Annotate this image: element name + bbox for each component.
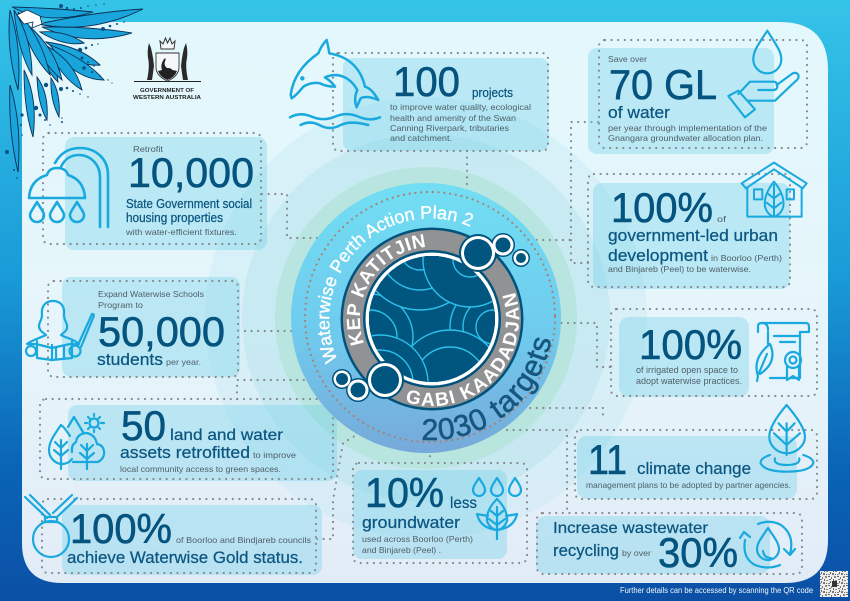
panel: 10,000 retrofit: Retrofit [133,144,164,154]
panel: 50 land and water assets: 50 [121,402,166,449]
logo: Government of Western Australia [133,38,201,101]
panel: 70 GL of water: of water [608,103,670,122]
panel: 100 projects: projects [472,86,513,100]
panel: 100% urban development [588,163,807,289]
panel: 100% Waterwise Gold: of Boorloo and Bindjareb councils [176,535,311,545]
icon: recycling water drop [740,522,795,568]
icon: trees, mountain and sun [49,414,104,469]
panel: 100 projects: and catchment. [390,133,452,143]
panel: 50 land and water assets [40,399,337,481]
panel: 10,000 retrofit: State Government social [126,197,252,211]
panel: 100% urban development: and Binjareb (Peel) to be waterwise. [608,264,751,274]
panel: 70 GL of water: 70 GL [609,61,717,108]
icon: eucalyptus leaves corner [5,3,143,179]
panel: 100% Waterwise Gold: 100% [70,505,172,552]
dotted pattern around the leaves [5,3,125,179]
panel: 70 GL of water [588,31,807,154]
panel: 100 projects: 100 [393,58,460,105]
panel: 100 projects: to improve water quality, ecological [390,102,531,112]
panel: 10% less groundwater: 10% [365,469,444,516]
panel: 100% urban development: development [608,246,708,265]
panel: 100% Waterwise Gold: achieve Waterwise Gold status. [67,548,303,567]
panel: 100% irrigated open space [611,309,817,397]
icon: certificate with leaf [756,323,809,381]
bubbles: bottom left [332,361,404,402]
connector lines [237,122,611,539]
icon: coat of arms [134,38,201,82]
footer note: Further details can be accessed by scanning the QR code [620,586,814,595]
panel: increase wastewater recycling [536,513,802,576]
icon: shower [29,148,108,227]
panel: 100% irrigated open space: of irrigated open space to [636,365,738,376]
panel: 11 climate change: climate change [637,459,751,478]
panel: 100% urban development: 100% [611,184,713,231]
icon: hand and water drop [728,31,799,117]
panel: 10% less groundwater: less [450,495,477,512]
panel: 10,000 retrofit [29,133,267,250]
icon: medal [25,495,77,557]
panel: 11 climate change [575,405,817,499]
panel: 50,000 students: per year. [166,357,201,367]
panel: 11 climate change: 11 [588,436,627,483]
panel: increase wastewater recycling: Increase wastewater [553,520,709,537]
icon: drops and leaves [473,478,521,539]
panel: 10% less groundwater [353,463,527,563]
curved title: Waterwise Perth Action Plan 2 [318,205,474,365]
panel: increase wastewater recycling: recycling [553,541,619,560]
concentric rings [205,97,647,539]
panel: 100 projects: health and amenity of the Swan [390,113,516,123]
panel: increase wastewater recycling: 30% [658,529,738,576]
panel: 100% urban development: in Boorloo (Perth) [711,253,782,263]
panel: 50,000 students: Program to [98,300,143,310]
panel: 50,000 students: students [97,350,163,369]
panel: 70 GL of water: Gnangara groundwater allocation plan. [608,133,763,143]
panel: 10% less groundwater: groundwater [362,513,460,532]
panel: 50,000 students: 50,000 [98,308,225,355]
ring text: Gabi Kaadadjan: GABI KAADADJAN [406,293,520,406]
dotted orbit [305,192,555,442]
panel: 50 land and water assets: local community access to green spaces. [120,464,281,474]
bubbles: top right [459,233,530,272]
central badge [291,183,561,453]
panel: increase wastewater recycling: by over [622,548,651,558]
curved label: 2030 targets: 2030 targets [422,338,551,440]
panel: 10,000 retrofit: with water-efficient fixtures. [125,227,237,237]
badge disc [291,183,561,453]
panel: 100% urban development: government-led urban [608,226,778,245]
panel: 50 land and water assets: land and water [170,427,284,444]
panel: 10% less groundwater: and Binjareb (Peel) . [362,545,441,555]
panel: 10,000 retrofit: 10,000 [128,149,254,196]
panel: 10% less groundwater: used across Boorloo (Perth) [362,534,473,544]
panel: 100% urban development: of [717,214,727,224]
panel: 50,000 students: Expand Waterwise Schools [98,289,204,299]
panel: 50 land and water assets: assets retrofitted [120,443,250,462]
logo: Government of Western Australia: WESTERN AUSTRALIA [133,95,201,101]
panel: 100% irrigated open space: adopt waterwise practices. [636,376,742,387]
QR code [820,571,848,597]
panel: 100% Waterwise Gold [25,495,322,575]
panel: 10,000 retrofit: housing properties [126,211,223,225]
panel: 100 projects [290,40,549,151]
panel: 70 GL of water: per year through implementation of the [608,123,767,133]
ring text: Kep Katitjin: KEP KATITJIN [346,234,425,346]
logo: Government of Western Australia: GOVERNMENT OF [140,88,195,94]
icon: dolphin [290,40,380,128]
icon: house with leaf [742,163,807,217]
icon: leaf on water [761,405,813,472]
panel: 100 projects: Canning Riverpark, tributaries [390,123,509,133]
panel: 11 climate change: management plans to be adopted by partner agencies. [586,480,791,490]
icon: student reading [26,301,94,360]
panel: 70 GL of water: Save over [608,54,647,64]
icon: bird [17,10,42,28]
panel: 50 land and water assets: to improve [253,450,296,460]
grey ring [340,228,524,410]
wave pattern [369,256,495,382]
panel: 50,000 students [26,277,240,377]
panel: 100% irrigated open space: 100% [639,321,742,368]
